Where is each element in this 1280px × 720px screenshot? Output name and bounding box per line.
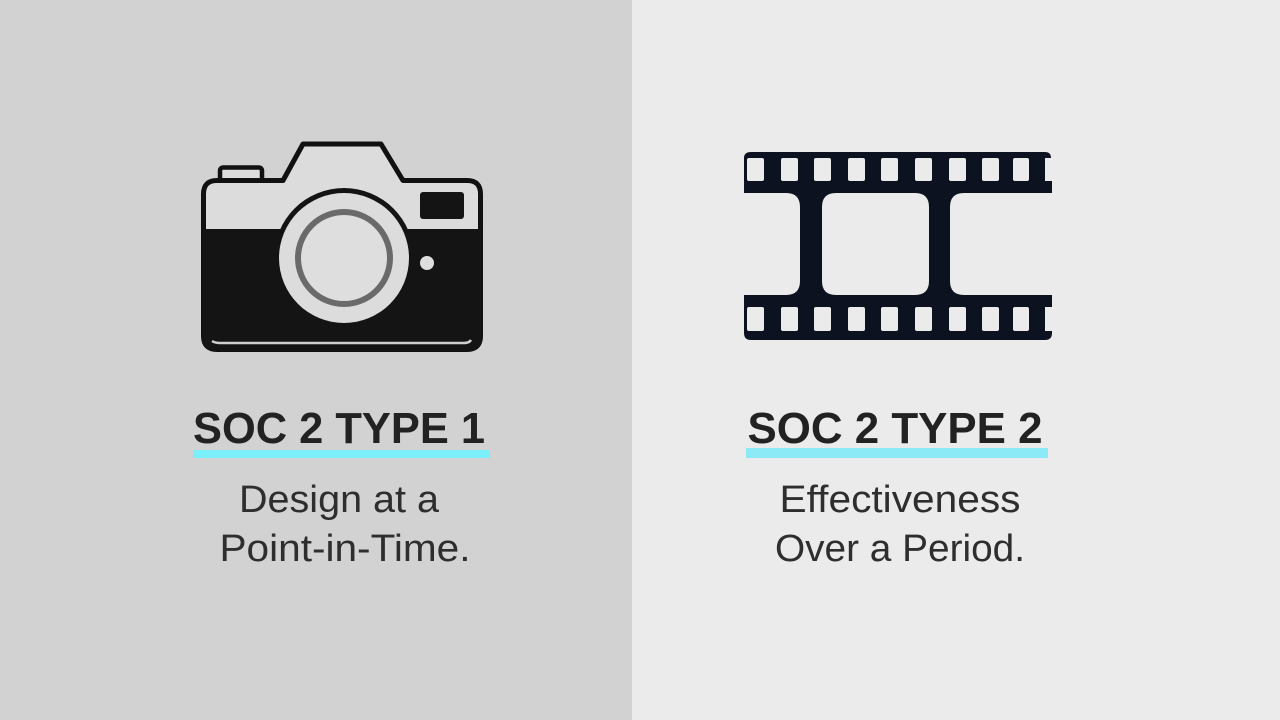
panel: SOC 2 Type 1 (0, 0, 632, 720)
camera base highlight (212, 340, 471, 343)
description: Type 2: Over a Period. (775, 528, 1025, 570)
film bottom perforations (747, 307, 1053, 331)
camera lower dark section (203, 229, 481, 351)
description: Type 1: Design at a (239, 479, 440, 521)
description: Type 2 (775, 479, 1025, 570)
camera viewfinder (420, 192, 464, 219)
icon: camera (203, 144, 481, 351)
camera shutter button (220, 168, 262, 184)
heading: SOC 2 Type 2: SOC 2 TYPE 2 (748, 404, 1042, 453)
panel: right background (632, 0, 1280, 720)
heading underline (193, 450, 490, 458)
description: Type 1: Point-in-Time. (220, 528, 470, 570)
description: Type 2: Effectiveness (780, 479, 1020, 521)
panel: SOC 2 Type 2 (744, 152, 1053, 570)
description: Type 1 (220, 479, 470, 570)
camera lens (274, 188, 414, 328)
film top perforations (747, 158, 1053, 181)
camera body (204, 144, 480, 350)
heading underline (746, 448, 1048, 458)
camera flash dot (420, 256, 434, 270)
icon: film strip (744, 152, 1053, 340)
heading: SOC 2 Type 1: SOC 2 TYPE 1 (193, 404, 485, 453)
